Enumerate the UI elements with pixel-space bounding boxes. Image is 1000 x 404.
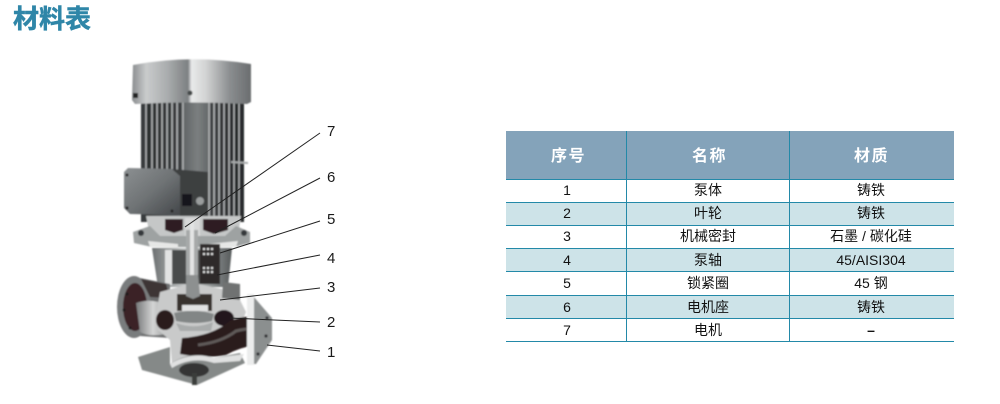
callout: part 2 bbox=[230, 314, 335, 331]
row 3: 机械密封 bbox=[680, 228, 736, 244]
row 1 bbox=[563, 182, 885, 198]
row 1: 1 bbox=[563, 182, 571, 198]
callout: part 3 bbox=[220, 279, 335, 300]
row 4 bbox=[563, 252, 906, 268]
row 2: 叶轮 bbox=[694, 205, 722, 221]
materials table bbox=[506, 131, 954, 342]
table striped rows bbox=[506, 202, 954, 318]
row 6 bbox=[563, 299, 885, 315]
callout: part 4 bbox=[217, 250, 335, 275]
row 5: 45 钢 bbox=[854, 275, 888, 291]
callout: part 7: 7 bbox=[327, 123, 335, 140]
row 1: 铸铁 bbox=[857, 182, 885, 198]
table header labels: 序号 bbox=[551, 146, 586, 165]
icon: base plate bbox=[138, 347, 245, 385]
row 4: 45/AISI304 bbox=[836, 252, 906, 268]
table header labels: 材质 bbox=[854, 146, 889, 165]
row 3 bbox=[563, 228, 912, 244]
callout: part 1 bbox=[267, 344, 335, 361]
table header labels bbox=[551, 146, 889, 165]
leader lines and part numbers bbox=[185, 123, 335, 361]
callout: part 2: 2 bbox=[327, 314, 335, 331]
row 7: – bbox=[867, 322, 875, 338]
title: 材料表 bbox=[13, 4, 91, 34]
row 7: 电机 bbox=[694, 322, 722, 338]
row 5 bbox=[563, 275, 888, 291]
callout: part 7 bbox=[185, 123, 335, 227]
row 3: 3 bbox=[563, 228, 571, 244]
row 5: 锁紧圈 bbox=[687, 275, 729, 291]
row 6: 铸铁 bbox=[857, 299, 885, 315]
row 6: 电机座 bbox=[687, 299, 729, 315]
table header labels: 名称 bbox=[692, 147, 727, 165]
row 5: 5 bbox=[563, 275, 571, 291]
callout: part 5: 5 bbox=[327, 211, 335, 228]
callout: part 6 bbox=[215, 169, 335, 233]
icon: terminal box bbox=[124, 168, 208, 216]
icon: lantern housing and shaft bbox=[152, 222, 232, 287]
row 1: 泵体 bbox=[694, 182, 722, 198]
table header background bbox=[506, 131, 954, 179]
row 4: 泵轴 bbox=[694, 252, 722, 268]
pump cutaway illustration bbox=[117, 59, 272, 385]
row 2: 铸铁 bbox=[857, 205, 885, 221]
callout: part 1: 1 bbox=[327, 344, 335, 361]
row 2 bbox=[563, 205, 885, 221]
callout: part 6: 6 bbox=[327, 169, 335, 186]
callout: part 5 bbox=[220, 211, 335, 253]
row 4: 4 bbox=[563, 252, 571, 268]
table body text bbox=[563, 182, 912, 338]
row 6: 6 bbox=[563, 299, 571, 315]
icon: inlet flange bbox=[117, 276, 170, 338]
icon: volute casing and impeller bbox=[156, 275, 246, 364]
row 3: 石墨 / 碳化硅 bbox=[830, 228, 912, 244]
callout: part 4: 4 bbox=[327, 250, 335, 267]
icon: motor mount and bracket bbox=[133, 216, 250, 248]
icon: outlet pipe and flange bbox=[180, 294, 272, 365]
row 2: 2 bbox=[563, 205, 571, 221]
row 7 bbox=[563, 322, 875, 338]
row 7: 7 bbox=[563, 322, 571, 338]
callout: part 3: 3 bbox=[327, 279, 335, 296]
icon: motor fan cover bbox=[132, 59, 251, 104]
icon: motor finned body bbox=[141, 102, 248, 222]
